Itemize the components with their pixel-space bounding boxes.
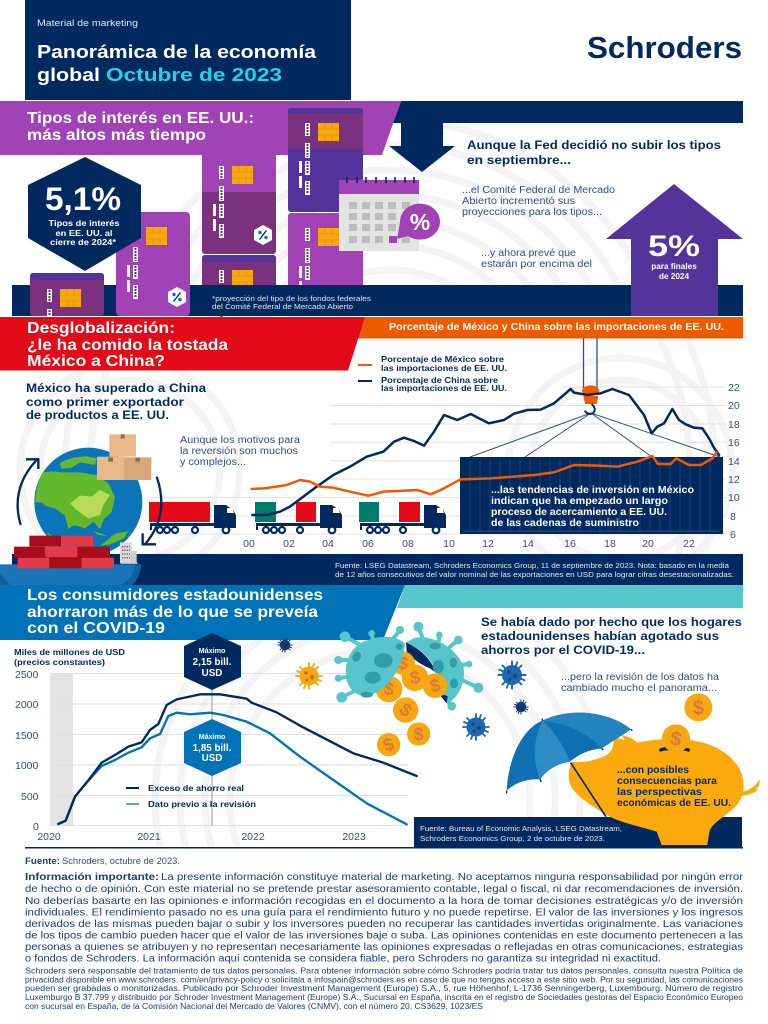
y axis labels: 18 [728, 419, 740, 431]
x axis labels: 16 [564, 538, 576, 550]
source section 2: Fuente: LSEG Datastream, Schroders Economics Group, 11 de septiembre de 2023. Nota: basado en la media [335, 561, 730, 570]
coins pile: $ [428, 675, 442, 696]
container box: proceso de acercamiento a EE. UU. [491, 507, 667, 518]
source section 2: de 12 años consecutivos del valor nominal de las exportaciones en USD para lograr cifras desestacionalizadas. [335, 570, 734, 579]
coins pile: $ [414, 724, 424, 744]
x axis labels: 20 [642, 538, 654, 550]
callout: 5,1% hexagon: 5,1% [45, 181, 121, 217]
footnote section 1: *proyección del tipo de los fondos federales [212, 294, 371, 303]
text: households heading: ahorros por el COVID-19... [481, 643, 645, 657]
section 2 title: ¿le ha comido la tostada [27, 337, 228, 354]
section 1 lower band [12, 285, 743, 316]
umbrella [507, 713, 632, 817]
line chart: savings: 2000 [15, 699, 39, 711]
legal text: Luxemburgo B 37.799 y distribuido por Schroder Investment Management (Europe) S.A., Sucursal en España, inscrita en el registro de Sociedades gestoras del Espacio Económico Europeo [25, 993, 744, 1002]
important information: personas a quienes se atribuyen y no representan necesariamente las opiniones expresadas o reflejadas en otras comunicaciones, estrategias [25, 942, 743, 953]
chart legend: las importaciones de EE. UU. [381, 384, 507, 393]
legal text: con sucursal en España, de la Comisión Nacional del Mercado de Valores (CNMV), con el número 20. CS3629. 1023/ES [25, 1002, 483, 1011]
source box section 3 [414, 817, 742, 847]
text: Mexico heading: México ha superado a China [26, 381, 206, 395]
coins pile: $ [382, 678, 396, 700]
y axis labels: 10 [728, 492, 740, 504]
chart legend: las importaciones de EE. UU. [381, 364, 507, 373]
x axis labels: 12 [482, 538, 494, 550]
x axis labels: 06 [362, 538, 374, 550]
important information: de los tipos de cambio pueden hacer que el valor de las inversiones baje o suba. Las opiniones contenidas en este documento pertenecen a las [25, 930, 743, 942]
section 1 title: más altos más tiempo [27, 127, 206, 144]
line chart: imports [149, 338, 740, 550]
text on pig: las perspectivas [617, 787, 702, 798]
callout: max 2,15: Máximo [199, 646, 226, 655]
decorative rings [16, 123, 736, 847]
line chart: savings: 1000 [15, 760, 39, 772]
callout: max 2,15: USD [202, 668, 222, 679]
text on pig: ...con posibles [617, 765, 689, 776]
cargo ship [0, 536, 141, 588]
arrow: 5% up: para finales [651, 262, 697, 271]
chart legend savings [126, 784, 256, 809]
source: Schroders, octubre de 2023. [62, 856, 180, 866]
callout: 5,1% hexagon: en EE. UU. al [56, 229, 112, 238]
section 1 title: Tipos de interés en EE. UU.: [27, 110, 254, 127]
series lines [252, 389, 719, 515]
text: reasons: la reversión son muchos [180, 446, 298, 457]
y axis labels: 14 [728, 456, 740, 468]
callout: 5,1% hexagon: cierre de 2024* [50, 238, 117, 247]
text: households heading [481, 615, 742, 657]
calendar icon [339, 177, 440, 251]
header panel: Material de marketing [37, 18, 138, 29]
section 2 banner: Porcentaje de México y China sobre las importaciones de EE. UU. [389, 322, 724, 333]
important information: No deberías basarte en las opiniones e información recogidas en el documento a la hora de tomar decisiones estratégicas y/o de inversión [25, 896, 743, 907]
section 3 title [27, 587, 323, 637]
line chart: savings: 2022 [241, 831, 265, 843]
text: above: estarán por encima del [481, 259, 592, 270]
chart legend: Porcentaje de México sobre [381, 355, 505, 364]
callout: max 2,15: 2,15 bill. [193, 657, 232, 668]
y axis labels: 6 [730, 529, 736, 541]
x axis labels: 04 [322, 538, 334, 550]
important information: Información importante: [25, 872, 159, 883]
card: bottom left [30, 273, 104, 316]
section 3 title: con el COVID-19 [27, 620, 165, 637]
card: second [116, 212, 190, 316]
important information [25, 872, 744, 964]
line chart: savings: 2500 [15, 669, 39, 681]
coins pile: $ [381, 734, 397, 756]
chart legend savings: Exceso de ahorro real [148, 784, 244, 793]
rule [25, 847, 743, 848]
text: above [481, 248, 592, 270]
callout: max 1,85: Máximo [199, 732, 226, 741]
line chart: savings: 2020 [37, 831, 61, 843]
x axis labels: 18 [604, 538, 616, 550]
callout: max 1,85 [184, 719, 241, 776]
container box: de las cadenas de suministro [491, 518, 639, 529]
text: Fed heading: en septiembre... [467, 153, 571, 167]
viruses [278, 638, 528, 740]
line chart: savings: 0 [33, 821, 39, 833]
callout: max 2,15 [184, 633, 241, 690]
text: FOMC: Abierto incrementó sus [462, 196, 575, 207]
section 2 title [27, 320, 228, 370]
legal text: pueden ser grabadas o monitorizadas. Publicado por Schroder Investment Management (Europe) S.A., 5, rue Höhenhof, L-1736 Senningerberg, Luxembourg. Número de registro [25, 984, 744, 993]
arrow: down [389, 123, 455, 172]
crane lines [470, 338, 720, 457]
x axis labels [243, 538, 695, 550]
piggy bank: $ [693, 697, 704, 719]
y axis labels: 22 [728, 382, 740, 394]
section 3 banner [0, 585, 743, 640]
x axis labels: 22 [683, 538, 695, 550]
section 1 banner [0, 101, 743, 155]
callout: 5,1% hexagon [28, 157, 141, 271]
section 2 title: Desglobalización: [27, 320, 175, 337]
important information: individuales. El rendimiento pasado no es una guía para el rendimiento futuro y no puede repetirse. El valor de las inversiones y los ingresos [25, 908, 743, 918]
text: reasons: Aunque los motivos para [180, 435, 301, 446]
arrows around globe [18, 459, 161, 544]
logo: Schroders [587, 30, 742, 65]
trucks [149, 502, 446, 533]
coins pile: $ [408, 667, 422, 688]
text: Fed heading: Aunque la Fed decidió no subir los tipos [467, 138, 721, 152]
callout: max 1,85: 1,85 bill. [193, 743, 232, 754]
section 2 banner [0, 317, 743, 370]
coins pile: $ [397, 653, 410, 674]
text: reasons [180, 435, 301, 468]
section 3 title: ahorraron más de lo que se preveía [27, 604, 318, 621]
chart legend savings: Dato previo a la revisión [148, 800, 256, 809]
text on pig: consecuencias para [617, 776, 717, 787]
text: above: ...y ahora prevé que [481, 248, 577, 259]
text on pig: económicas de EE. UU. [617, 798, 731, 809]
coins pile [376, 652, 447, 756]
header panel: Octubre de 2023 [106, 64, 282, 85]
legal text: Schroders será responsable del tratamiento de tus datos personales. Para obtener información sobre cómo Schroders podría tratar tus datos personales, consulta nuestra Política de [25, 966, 744, 976]
axis title: Miles de millones de USD [14, 648, 125, 657]
right virus half [406, 622, 483, 710]
text: Mexico heading: como primer exportador [26, 395, 184, 409]
footnote section 1 [212, 294, 371, 311]
x axis labels: 10 [443, 538, 455, 550]
axis title [14, 648, 125, 667]
source section 2 [335, 561, 734, 579]
callout: max 1,85: USD [202, 753, 222, 764]
x axis labels: 02 [283, 538, 295, 550]
line chart: savings: 2021 [137, 831, 161, 843]
arrow: 5% up [606, 184, 743, 316]
important information: o fondos de Schroders. La información aquí contenida se considera fiable, pero Schroders no garantiza su integridad ni exactitud. [25, 954, 661, 964]
coins pile: $ [395, 699, 416, 721]
important information: derivados de las mismas pueden bajar o subir y los inversores pueden no recuperar las cantidades invertidas originalmente. Las variaciones [25, 919, 743, 930]
y axis labels: 12 [728, 474, 740, 486]
text: households heading: estadounidenses habían agotado sus [481, 629, 719, 643]
container box: ...las tendencias de inversión en México [491, 485, 694, 496]
source box section 3: Fuente: Bureau of Economic Analysis, LSEG Datastream, [420, 824, 622, 833]
boxes [97, 434, 151, 480]
text: FOMC [462, 185, 616, 218]
chart legend [358, 355, 507, 393]
chart legend: Porcentaje de China sobre [381, 376, 498, 385]
arrow: 5% up: de 2024 [659, 272, 689, 281]
section 2 title: México a China? [27, 353, 165, 370]
container box: indican que ha empezado un largo [491, 496, 668, 507]
legal text: privacidad disponible en www.schroders. com/en/privacy-policy o solicítala a infospain@schroders.es en caso de que no tengas acceso a este sitio web. Por su seguridad, las comunicaciones [25, 976, 743, 984]
calendar icon: % [410, 209, 430, 235]
text: revision: ...pero la revisión de los datos ha [561, 672, 720, 683]
text on pig [617, 765, 731, 809]
line chart: savings: 1500 [15, 730, 39, 742]
legal text [25, 966, 744, 1011]
important information: de hecho o de opinión. Con este material no se pretende prestar asesoramiento contable, legal o fiscal, ni dar recomendaciones de inversión. [25, 884, 743, 895]
text: Fed heading [467, 138, 721, 167]
header panel: Panorámica de la economía [37, 41, 317, 62]
section 1 title [27, 110, 254, 144]
x axis labels: 00 [243, 538, 255, 550]
x axis labels: 08 [402, 538, 414, 550]
text: reasons: y complejos... [180, 457, 246, 468]
header panel: global [37, 64, 100, 85]
text: revision: cambiado mucho el panorama... [561, 683, 717, 694]
text: Mexico heading [26, 381, 206, 422]
piggy bank [569, 693, 760, 845]
cards rising illustration [202, 108, 363, 342]
y axis labels: 8 [730, 511, 736, 523]
piggy bank: $ [668, 728, 683, 751]
important information: La presente información constituye material de marketing. No aceptamos ninguna responsabilidad por ningún error [161, 872, 744, 883]
big virus with coins [334, 622, 483, 756]
source: Fuente: [25, 856, 60, 866]
text: FOMC: proyecciones para los tipos... [462, 207, 602, 218]
y axis labels [728, 382, 740, 541]
left virus half [334, 626, 405, 703]
globe [34, 448, 142, 556]
container box [460, 457, 723, 534]
text: households heading: Se había dado por hecho que los hogares [481, 615, 742, 629]
callout: 5,1% hexagon: Tipos de interés [48, 219, 120, 228]
source box section 3: Schroders Economics Group, 2 de octubre de 2023. [420, 834, 605, 843]
y axis labels: 16 [728, 437, 740, 449]
text: revision [561, 672, 720, 694]
section 3 title: Los consumidores estadounidenses [27, 587, 323, 604]
line chart: savings: 2023 [342, 831, 366, 843]
line chart: savings [15, 669, 417, 843]
x axis labels: 14 [522, 538, 534, 550]
section 2 lower band [12, 554, 743, 585]
arrow: 5% up: 5% [648, 230, 700, 263]
footnote section 1: del Comité Federal de Mercado Abierto [212, 302, 353, 311]
text: FOMC: ...el Comité Federal de Mercado [462, 185, 616, 196]
axis title: (precios constantes) [14, 658, 105, 667]
text: Mexico heading: de productos a EE. UU. [26, 408, 169, 422]
crane block [582, 385, 599, 414]
header panel [25, 0, 351, 100]
y axis labels: 20 [728, 400, 740, 412]
line chart: savings: 500 [21, 791, 39, 803]
